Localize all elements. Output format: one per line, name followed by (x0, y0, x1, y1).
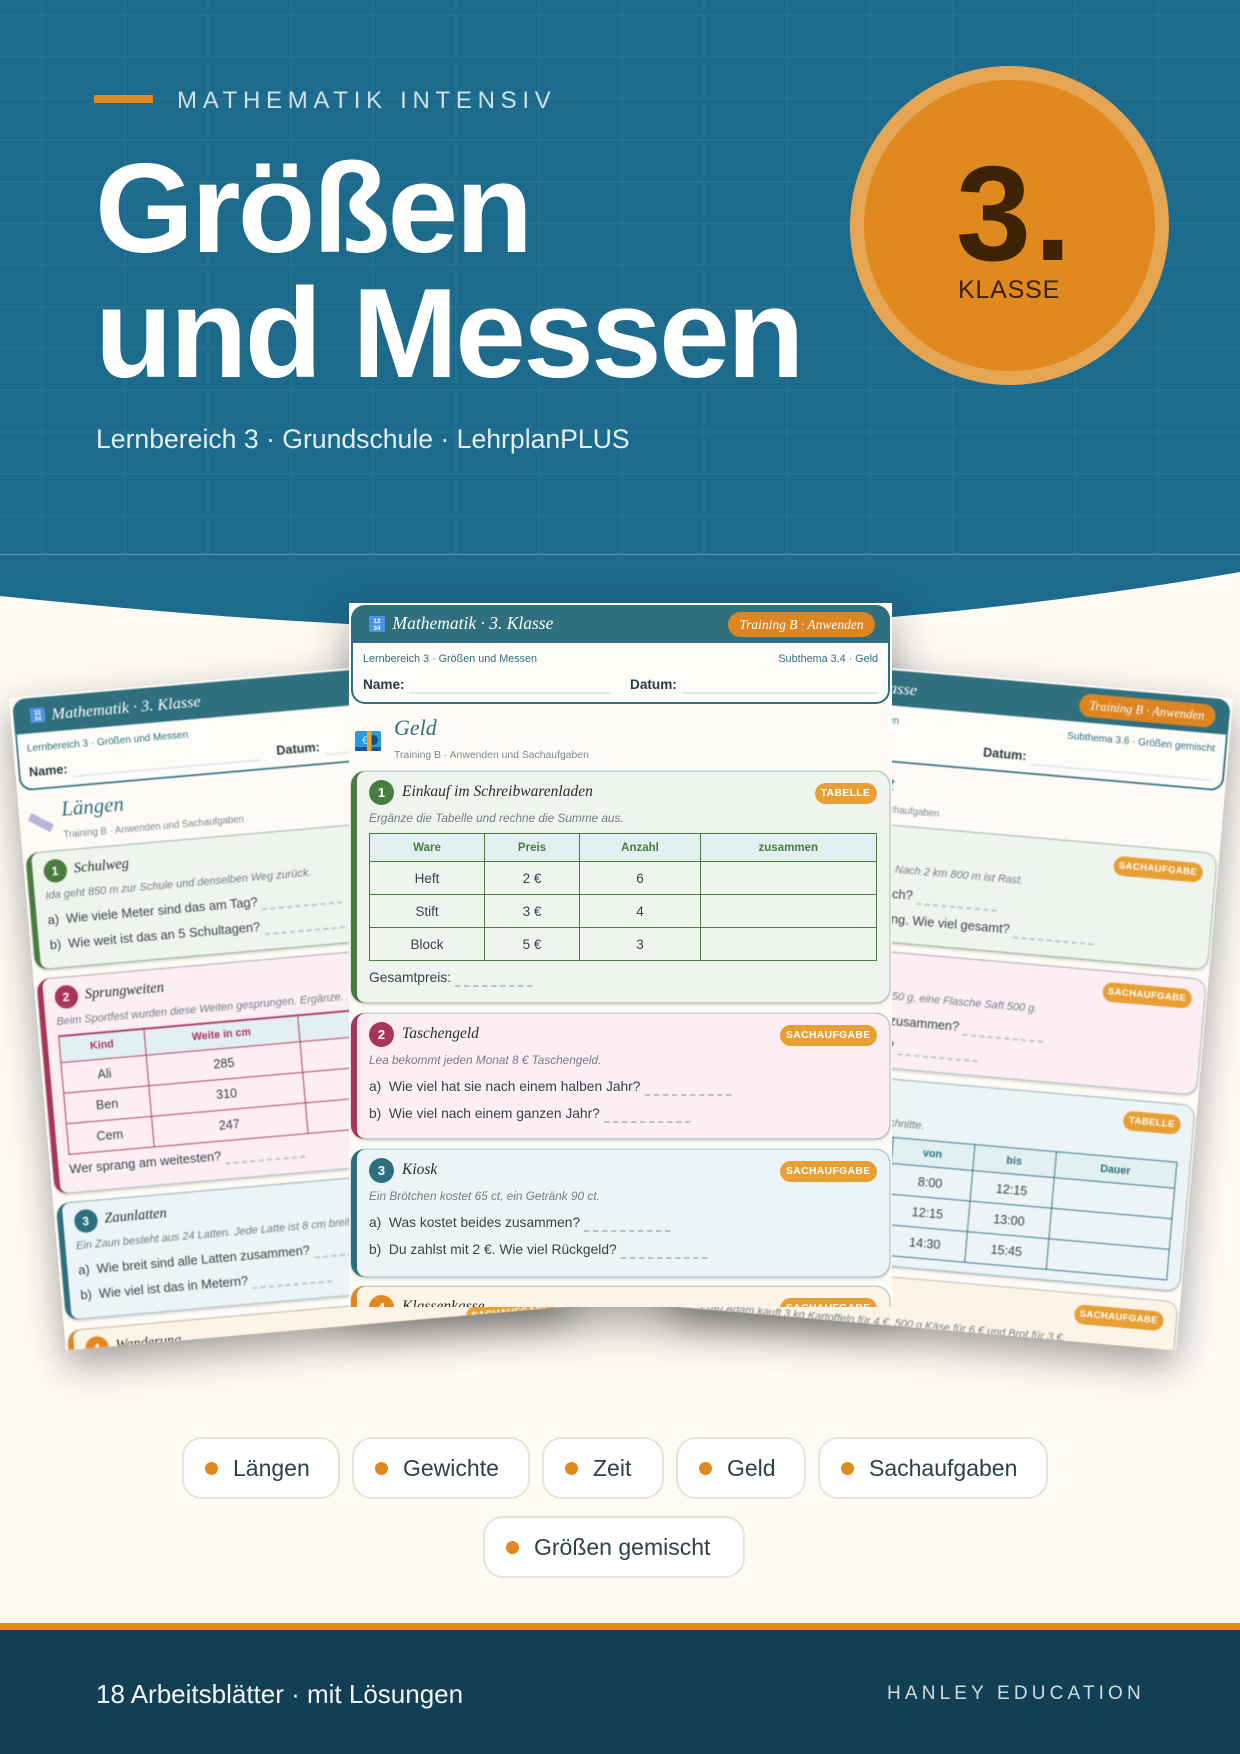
card 2: Wie viel mehr? (808, 1032, 894, 1053)
table: Anzahl (621, 842, 659, 854)
table: 5 € (523, 936, 541, 952)
card 3: Kiosk: SACHAUFGABE (786, 1166, 870, 1176)
chip: Gewichte: Gewichte (403, 1455, 499, 1481)
card 3: Kiosk (351, 1149, 890, 1277)
card 4: Frau Adam kauft 3 kg Kartoffeln für 4 €, 500 g Käse für 6 € und Brot für 3 €. (700, 1299, 1065, 1344)
table: 4 (636, 904, 644, 918)
card 2: Taschengeld: a) Wie viel hat sie nach einem halben Jahr? (369, 1079, 640, 1094)
card 2: Taschengeld: SACHAUFGABE (786, 1030, 870, 1040)
card 3: Kiosk: b) Du zahlst mit 2 €. Wie viel Rückgeld? (369, 1242, 617, 1257)
footer left text: 18 Arbeitsblätter · mit Lösungen (96, 1679, 463, 1709)
card 2: Taschengeld: b) Wie viel nach einem ganzen Jahr? (369, 1106, 600, 1121)
chip: Geld (676, 1437, 806, 1499)
info box: Subthema 3.4 · Geld (778, 653, 878, 665)
info box: Lernbereich 3 · Größen und Messen (737, 701, 899, 727)
chip: Gewichte (352, 1437, 530, 1499)
table: Heft (415, 870, 439, 886)
card 1: Schulweg: 1 (51, 863, 59, 878)
worksheet center: Geld (348, 603, 892, 1307)
card 2: SACHAUFGABE (1107, 986, 1186, 1003)
icon: number tile: 12 (33, 710, 41, 717)
table: bis (1005, 1155, 1022, 1167)
footer stripe (0, 1623, 1240, 1630)
hero background with grid (0, 0, 1240, 624)
card 1: Schulweg: Schulweg (73, 856, 130, 876)
card 4: Wanderung: SACHAUFGABE (471, 1304, 550, 1321)
sheet header (728, 656, 1230, 735)
sheet header (351, 605, 890, 643)
card 1: Schulweg: Ida geht 850 m zur Schule und denselben Weg zurück. (45, 866, 312, 902)
table: 15:45 (990, 1242, 1022, 1259)
table: 6 (636, 870, 644, 886)
info box: Name: (28, 762, 68, 779)
card 1: Einkauf im Schreibwarenladen: TABELLE (821, 788, 870, 798)
table: 14:30 (908, 1235, 941, 1252)
card 3: TABELLE (1128, 1115, 1175, 1129)
sheet header (11, 656, 514, 735)
card 1: SACHAUFGABE (1118, 860, 1197, 877)
info box: Datum: (982, 745, 1027, 763)
card 3: Zaunlatten: 3 (82, 1213, 89, 1228)
card 4: Wanderung (67, 1287, 571, 1386)
header title: Mathematik · 3. Klasse (767, 668, 917, 699)
card 2: Taschengeld: 2 (378, 1026, 385, 1042)
card 3: Zaunlatten: Ein Zaun besteht aus 24 Latten. Jede Latte ist 8 cm breit. (75, 1215, 354, 1252)
table: Weite in cm (191, 1027, 251, 1043)
info box: Lernbereich 3 · Größen und Messen (26, 729, 189, 754)
info box (723, 691, 1227, 791)
card 3: Zaunlatten: b) Wie viel ist das in Metern? (80, 1274, 249, 1302)
table: Cem (96, 1127, 124, 1143)
card 2 (696, 936, 1206, 1095)
table: Preis (518, 842, 546, 854)
info box (15, 691, 519, 791)
title (95, 137, 802, 404)
table: 8:00 (917, 1174, 942, 1190)
card 2: Sprungweiten: Beim Sportfest wurden diese Weiten gesprungen. Ergänze. (56, 990, 344, 1028)
sheet subheading: Training B · Anwenden und Sachaufgaben (758, 794, 939, 820)
table: Dauer (1099, 1163, 1130, 1177)
info box: Lernbereich 3 · Größen und Messen (363, 653, 537, 665)
card 3: Berechne die Abschnitte. (802, 1109, 924, 1132)
card 4: SACHAUFGABE (1079, 1309, 1158, 1326)
table: zusammen (759, 842, 818, 854)
sheet subheading: Training B · Anwenden und Sachaufgaben (394, 750, 589, 761)
sheet heading: Größen gemischt (760, 761, 895, 795)
table: Ali (97, 1066, 112, 1081)
card 2: Wie viel wiegt das zusammen? (783, 1004, 959, 1033)
table: in m (402, 1012, 425, 1025)
card 1: Einkauf im Schreibwarenladen: Gesamtpreis: (369, 970, 451, 985)
table: von (922, 1148, 942, 1160)
card 3: Zaunlatten: Zaunlatten (104, 1205, 167, 1226)
worksheet right: Größen gemischt (671, 654, 1232, 1350)
info box: Datum: (276, 740, 320, 758)
header title: Mathematik · 3. Klasse (51, 692, 201, 723)
icon: number tile (29, 706, 46, 724)
chip: Sachaufgaben (818, 1437, 1048, 1499)
title: Größen (95, 137, 530, 279)
card 2: Taschengeld: Taschengeld (402, 1025, 479, 1042)
info box: Subthema 3.6 · Größen gemischt (1066, 730, 1215, 754)
table: 285 (213, 1055, 235, 1071)
icon: number tile: 34 (34, 716, 42, 723)
card 4 (671, 1258, 1177, 1376)
table: 2 € (523, 870, 541, 886)
worksheet shadows (0, 598, 1240, 1387)
card 1: Einkauf im Schreibwarenladen: Ergänze die Tabelle und rechne die Summe aus. (369, 811, 624, 825)
info box (351, 643, 890, 704)
chip: Größen gemischt (483, 1516, 745, 1578)
card 1: Nach 2 km 800 m ist Rast. (894, 863, 1023, 887)
table: Kind (90, 1039, 114, 1052)
table: Block (410, 936, 444, 952)
icon: ruler (28, 813, 54, 832)
info box: Datum: (630, 677, 677, 692)
table (58, 994, 538, 1154)
grade label: KLASSE (958, 276, 1060, 304)
table (892, 1136, 1178, 1282)
card 1: Wanderung. Wie viel gesamt? (839, 907, 1010, 936)
card 1 (707, 810, 1217, 970)
grade number: 3. (956, 138, 1075, 289)
header pill: Training B · Anwenden (1088, 699, 1205, 723)
card 1: Schulweg: a) Wie viele Meter sind das am Tag? (47, 895, 258, 927)
accent bar (94, 95, 153, 103)
chip: Zeit: Zeit (593, 1455, 631, 1481)
card 1: Einkauf im Schreibwarenladen: Einkauf im Schreibwarenladen (402, 783, 593, 800)
card 2: 250 g, eine Flasche Saft 500 g. (885, 989, 1037, 1015)
topic chips (182, 1437, 1048, 1578)
grade badge (850, 66, 1169, 385)
card 2: Sprungweiten: 2 (62, 989, 70, 1004)
table: 310 (216, 1086, 238, 1102)
chip: Längen (182, 1437, 340, 1499)
card 1: Wie weit ist es noch? (792, 878, 913, 902)
header title: Mathematik · 3. Klasse (392, 613, 553, 633)
card 3: Kiosk: a) Was kostet beides zusammen? (369, 1215, 580, 1230)
footer (0, 1630, 1240, 1754)
worksheet left: Längen (9, 654, 570, 1350)
card 3 (679, 1062, 1194, 1292)
card 3: Kiosk: Ein Brötchen kostet 65 ct, ein Getränk 90 ct. (369, 1189, 600, 1203)
table: 247 (218, 1117, 240, 1132)
table: 12:15 (995, 1181, 1027, 1198)
icon: cash: € (362, 735, 368, 747)
header pill (728, 612, 875, 637)
header pill (1077, 693, 1216, 728)
subtitle: Lernbereich 3 · Grundschule · LehrplanPLUS (96, 424, 630, 454)
footer brand: HANLEY EDUCATION (887, 1683, 1145, 1704)
card 2: Sprungweiten: Wer sprang am weitesten? (69, 1149, 222, 1176)
chip: Geld: Geld (727, 1455, 776, 1481)
card 1: Schulweg: b) Wie weit ist das an 5 Schultagen? (49, 920, 261, 952)
card 3: Zaunlatten (56, 1160, 565, 1320)
card 1: Schulweg (25, 810, 535, 970)
header pill: Training B · Anwenden (739, 617, 864, 632)
card 1: Einkauf im Schreibwarenladen (351, 771, 890, 1003)
card 2: Sprungweiten (36, 936, 554, 1194)
card 2: Taschengeld (351, 1013, 890, 1139)
card 2: Taschengeld: Lea bekommt jeden Monat 8 € Taschengeld. (369, 1053, 601, 1067)
table: Ben (95, 1096, 119, 1112)
chip: Zeit (542, 1437, 664, 1499)
icon: number tile: 34 (373, 625, 381, 632)
sheet heading: Geld (394, 715, 437, 740)
title: und Messen (95, 262, 802, 404)
icon: number tile: 12 (373, 618, 381, 625)
sheet subheading: Training B · Anwenden und Sachaufgaben (63, 815, 245, 841)
table: 12:15 (911, 1204, 943, 1221)
table (369, 833, 877, 961)
card 3: Kiosk: Kiosk (402, 1161, 437, 1178)
card 1: Einkauf im Schreibwarenladen: 1 (378, 784, 385, 800)
card 3: Kiosk: 3 (378, 1162, 385, 1178)
table: 13:00 (992, 1212, 1025, 1228)
card 2: Sprungweiten: Sprungweiten (84, 980, 165, 1002)
icon: cash (355, 731, 381, 751)
chip: Sachaufgaben: Sachaufgaben (869, 1455, 1017, 1481)
card 3: Zaunlatten: a) Wie breit sind alle Latten zusammen? (78, 1243, 310, 1277)
card 4: Klassenkasse (351, 1286, 890, 1346)
chip: Größen gemischt: Größen gemischt (534, 1534, 710, 1560)
sheet heading: Längen (60, 792, 125, 820)
table: 3 (636, 936, 644, 952)
eyebrow: MATHEMATIK INTENSIV (177, 87, 556, 114)
table: 3 € (523, 904, 541, 918)
info box: Name: (363, 677, 405, 692)
icon: number tile (369, 616, 385, 632)
table: Stift (415, 904, 439, 918)
table: Ware (413, 842, 441, 854)
chip: Längen: Längen (233, 1455, 310, 1481)
